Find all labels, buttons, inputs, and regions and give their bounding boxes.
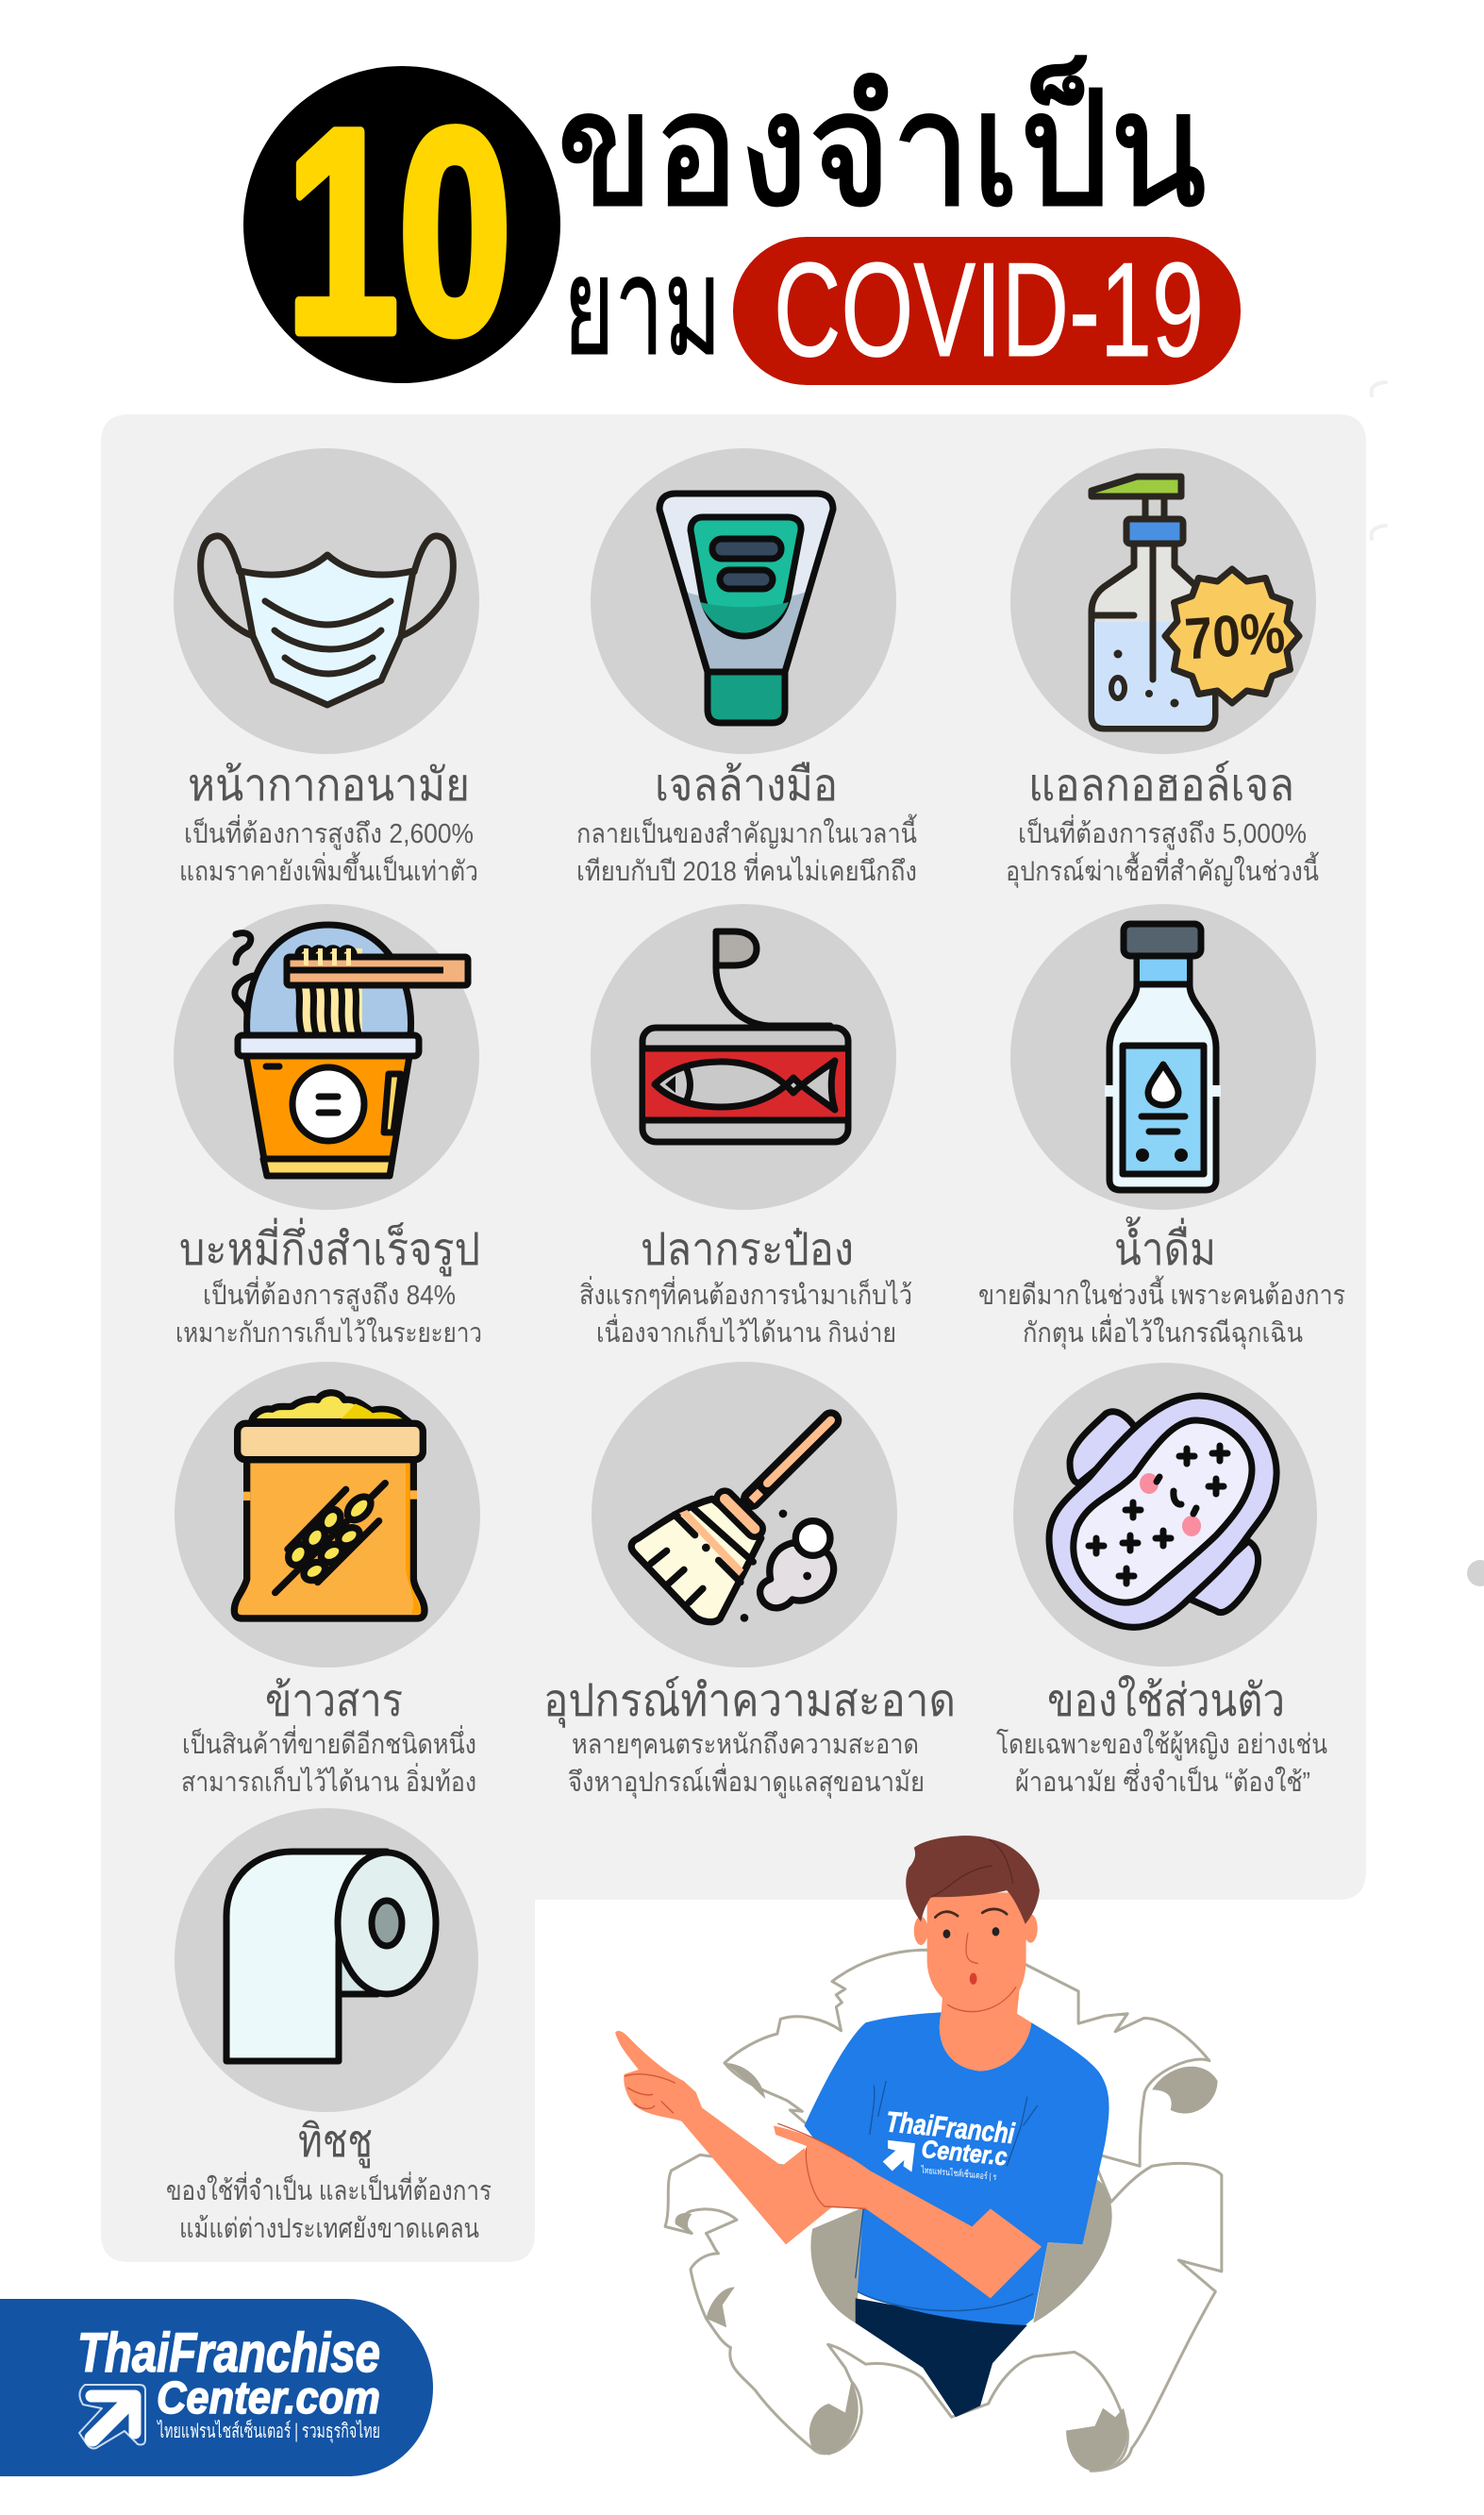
item: tissue: แม้แต่ต่างประเทศยังขาดแคลน bbox=[179, 2214, 479, 2244]
item: tissue: ทิชชู bbox=[298, 2117, 373, 2169]
item: instant noodles: เหมาะกับการเก็บไว้ในระยะยาว bbox=[175, 1316, 482, 1349]
item: hand gel: กลายเป็นของสำคัญมากในเวลานี้ bbox=[576, 813, 917, 849]
icon: fish can bbox=[642, 931, 848, 1142]
icon: toilet paper roll bbox=[226, 1852, 436, 2061]
item: hand gel: เจลล้างมือ bbox=[655, 761, 838, 811]
item: personal items: ของใช้ส่วนตัว bbox=[1047, 1674, 1285, 1726]
icon: face mask bbox=[201, 536, 453, 705]
item: instant noodles: เป็นที่ต้องการสูงถึง 84% bbox=[203, 1276, 456, 1312]
item: instant noodles bbox=[174, 904, 482, 1349]
logo: ThaiFranchise Center.com bbox=[0, 2299, 433, 2476]
neck bbox=[940, 1973, 1031, 2071]
logo: ThaiFranchise Center.com: ThaiFranchise bbox=[77, 2322, 380, 2384]
item: hand gel: เทียบกับปี 2018 ที่คนไม่เคยนึกถึง bbox=[576, 852, 917, 887]
item: instant noodles: บะหมี่กึ่งสำเร็จรูป bbox=[179, 1217, 480, 1277]
item: personal items: โดยเฉพาะของใช้ผู้หญิง อย่างเช่น bbox=[996, 1728, 1327, 1761]
item: drinking water: ขายดีมากในช่วงนี้ เพราะคนต้องการ bbox=[978, 1275, 1345, 1311]
icon: sanitizer bottle: 70% bbox=[1183, 600, 1287, 672]
item: drinking water: น้ำดื่ม bbox=[1114, 1216, 1216, 1275]
item: rice: สามารถเก็บไว้ได้นาน อิ่มท้อง bbox=[181, 1763, 476, 1798]
shirt logo: ไทยแฟรนไชส์เซ็นเตอร์ | ร bbox=[920, 2163, 997, 2182]
logo: ThaiFranchise Center.com: ไทยแฟรนไชส์เซ็นเตอร์ | รวมธุรกิจไทย bbox=[157, 2418, 380, 2443]
item: cleaning tools bbox=[543, 1362, 956, 1799]
item: canned fish bbox=[579, 904, 912, 1349]
item: personal items: ผ้าอนามัย ซึ่งจำเป็น “ต้องใช้” bbox=[1015, 1763, 1310, 1798]
item: face mask: แถมราคายังเพิ่มขึ้นเป็นเท่าตัว bbox=[179, 851, 478, 887]
hair bbox=[906, 1836, 1040, 1924]
item: canned fish: เนื่องจากเก็บไว้ได้นาน กินง่าย bbox=[596, 1314, 896, 1349]
icon: arrow bbox=[79, 2385, 145, 2448]
heading: essentials: ของจำเป็น bbox=[557, 57, 1207, 240]
torn paper bbox=[665, 1950, 1222, 2471]
red pill: COVID-19: COVID-19 bbox=[774, 235, 1204, 385]
icon: broom and dust bbox=[631, 1420, 834, 1622]
heading: during: ยาม bbox=[563, 230, 722, 383]
item: face mask bbox=[174, 448, 479, 887]
item: alcohol gel bbox=[1006, 448, 1319, 888]
hole behind the man bbox=[810, 2177, 1112, 2323]
item: alcohol gel: เป็นที่ต้องการสูงถึง 5,000% bbox=[1018, 814, 1307, 850]
item: drinking water: กักตุน เผื่อไว้ในกรณีฉุกเฉิน bbox=[1023, 1314, 1303, 1350]
item: hand gel bbox=[576, 448, 917, 887]
shorts bbox=[856, 2298, 1027, 2417]
icon: gel tube bbox=[659, 494, 833, 723]
logo: ThaiFranchise Center.com: Center.com bbox=[157, 2373, 380, 2423]
item: face mask: หน้ากากอนามัย bbox=[188, 761, 470, 811]
item: canned fish: ปลากระป๋อง bbox=[641, 1225, 854, 1275]
shirt logo: ThaiFranchi bbox=[885, 2106, 1016, 2151]
item: alcohol gel: แอลกอฮอล์เจล bbox=[1028, 761, 1294, 811]
faint decorative marks bbox=[1372, 382, 1484, 1586]
illustration: man pointing through torn paper bbox=[615, 1836, 1222, 2471]
item: cleaning tools: อุปกรณ์ทำความสะอาด bbox=[543, 1676, 956, 1728]
shirt logo bbox=[883, 2106, 1016, 2182]
icon: sanitary pad bbox=[1049, 1396, 1276, 1627]
head bbox=[914, 1893, 1038, 2014]
item: personal items bbox=[996, 1363, 1327, 1798]
item: rice: เป็นสินค้าที่ขายดีอีกชนิดหนึ่ง bbox=[182, 1725, 476, 1760]
icon: water bottle bbox=[1105, 924, 1221, 1190]
item: rice bbox=[175, 1362, 480, 1798]
item: drinking water bbox=[978, 904, 1345, 1350]
icon: noodle cup bbox=[235, 925, 468, 1176]
icon: sanitizer bottle bbox=[1092, 477, 1299, 729]
right pointing hand and forearm bbox=[774, 2125, 1042, 2298]
item: cleaning tools: จึงหาอุปกรณ์เพื่อมาดูแลสุขอนามัย bbox=[568, 1763, 925, 1799]
panel: grey background bbox=[101, 414, 1366, 2262]
item: rice: ข้าวสาร bbox=[265, 1676, 403, 1726]
item: canned fish: สิ่งแรกๆที่คนต้องการนำมาเก็บไว้ bbox=[579, 1276, 912, 1311]
shirt folds bbox=[856, 2081, 1038, 2311]
left pointing arm bbox=[615, 2031, 833, 2244]
item: alcohol gel: อุปกรณ์ฆ่าเชื้อที่สำคัญในช่วงนี้ bbox=[1006, 851, 1319, 888]
shirt logo: Center.c bbox=[921, 2136, 1009, 2171]
title block bbox=[243, 57, 1241, 394]
item: cleaning tools: หลายๆคนตระหนักถึงความสะอาด bbox=[572, 1730, 919, 1760]
item: face mask: เป็นที่ต้องการสูงถึง 2,600% bbox=[184, 814, 474, 850]
t-shirt bbox=[805, 2012, 1109, 2325]
icon: rice sack bbox=[234, 1393, 425, 1618]
item: tissue bbox=[166, 1808, 492, 2244]
item: tissue: ของใช้ที่จำเป็น และเป็นที่ต้องการ bbox=[166, 2171, 492, 2206]
black circle with number 10: 10 bbox=[286, 70, 511, 394]
